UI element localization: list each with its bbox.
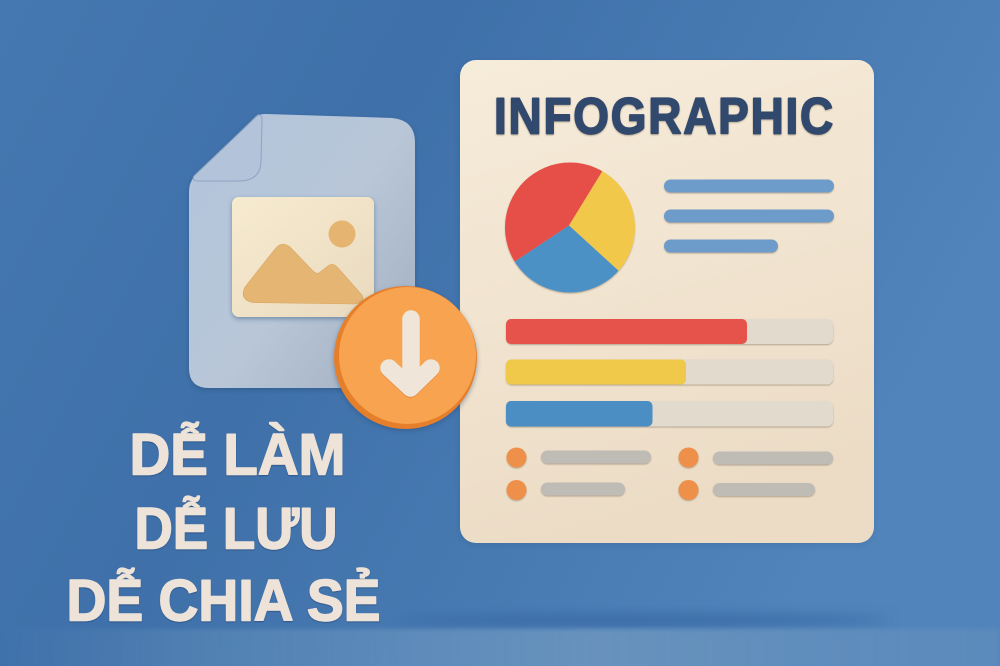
sun <box>328 220 356 248</box>
heading: INFOGRAPHIC: INFOGRAPHIC <box>494 88 835 145</box>
picture frame <box>232 197 374 317</box>
pie chart <box>504 162 636 294</box>
arrow shadow <box>389 320 431 389</box>
folded corner <box>193 115 262 181</box>
mountains <box>243 244 363 304</box>
file page <box>189 114 415 388</box>
slogan text: DỄ LƯU <box>134 496 338 562</box>
slogan text: DỄ CHIA SẺ <box>66 568 380 634</box>
slogan text: DỄ LÀM <box>130 422 346 488</box>
slogan text <box>66 422 380 634</box>
icon: image file <box>189 114 415 388</box>
panel: infographic card <box>450 50 874 543</box>
bar chart <box>506 319 833 426</box>
icon: download button <box>334 286 477 429</box>
arrow: down <box>389 319 431 388</box>
legend list <box>506 448 833 500</box>
text lines: blue <box>664 180 834 252</box>
